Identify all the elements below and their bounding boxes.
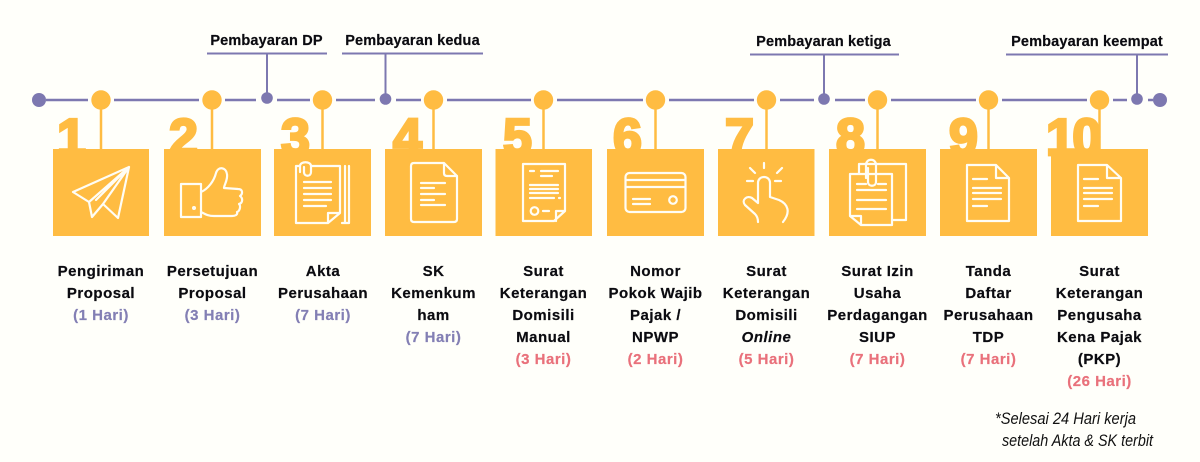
step 3: [274, 90, 371, 324]
icon: credit card: [626, 173, 686, 212]
label: Surat Keterangan Domisili Manual: Manual: [516, 329, 571, 346]
label: Surat Keterangan Domisili Manual: Surat: [523, 263, 564, 280]
label: PKP: (26 Hari): [1067, 373, 1132, 390]
label: Akta Perusahaan: Perusahaan: [278, 285, 368, 302]
timeline line: [46, 99, 1153, 101]
payment marker: Pembayaran ketiga: [750, 34, 899, 105]
label: TDP: TDP: [973, 329, 1004, 346]
step 10: [1046, 90, 1148, 390]
label: PKP: [1056, 263, 1143, 390]
label: NPWP: NPWP: [632, 329, 679, 346]
label: Domisili Online: Keterangan: [723, 285, 810, 302]
label: SK Kemenkumham: (7 Hari): [406, 329, 461, 346]
label: PKP: Kena Pajak: [1057, 329, 1142, 346]
step 8: 8: [836, 109, 865, 167]
label: NPWP: Nomor: [630, 263, 681, 280]
label: SK Kemenkumham: ham: [417, 307, 450, 324]
label: Pengiriman Proposal: Proposal: [67, 285, 135, 302]
step 5: [496, 90, 592, 368]
label: Persetujuan Proposal: Persetujuan: [167, 263, 258, 280]
label: Akta Perusahaan: Akta: [306, 263, 340, 280]
icon: document: [1078, 165, 1121, 221]
label: SIUP: Surat Izin: [841, 263, 914, 280]
label: SIUP: Perdagangan: [827, 307, 928, 324]
label: Domisili Online: [723, 263, 810, 368]
label: PKP: Surat: [1079, 263, 1120, 280]
step 7: 7: [725, 109, 754, 167]
label: TDP: (7 Hari): [961, 351, 1016, 368]
label: PKP: Pengusaha: [1057, 307, 1142, 324]
label: Persetujuan Proposal: [167, 263, 258, 324]
icon: document: [967, 165, 1009, 221]
step 1: 1: [57, 109, 86, 167]
label: SIUP: SIUP: [859, 329, 896, 346]
label: TDP: [943, 263, 1034, 368]
icon: clipped document stack: [296, 162, 349, 223]
label: SIUP: [827, 263, 928, 368]
step 3: 3: [281, 109, 310, 167]
step 2: [164, 90, 261, 324]
label: Persetujuan Proposal: Proposal: [178, 285, 247, 302]
label: Pengiriman Proposal: (1 Hari): [73, 307, 129, 324]
icon: rounded document: [411, 163, 457, 222]
label: Surat Keterangan Domisili Manual: Domisili: [512, 307, 575, 324]
icon: tapping finger: [744, 163, 788, 222]
icon: paper plane: [73, 167, 129, 218]
footnote: *Selesai 24 Hari kerja: [995, 410, 1136, 428]
icon: certificate document: [523, 164, 565, 221]
label: NPWP: (2 Hari): [628, 351, 683, 368]
step 7: [718, 90, 814, 368]
label: TDP: Tanda: [966, 263, 1011, 280]
label: Akta Perusahaan: [278, 263, 368, 324]
timeline end dot: [1153, 93, 1167, 107]
label: NPWP: Pajak /: [630, 307, 681, 324]
payment marker: Pembayaran ketiga: Pembayaran ketiga: [756, 34, 892, 50]
label: NPWP: Pokok Wajib: [608, 285, 703, 302]
payment marker: Pembayaran DP: [207, 33, 327, 104]
label: Akta Perusahaan: (7 Hari): [295, 307, 351, 324]
label: Domisili Online: Surat: [746, 263, 787, 280]
label: SK Kemenkumham: [391, 263, 476, 346]
payment marker: Pembayaran kedua: Pembayaran kedua: [345, 33, 481, 49]
footnote: [995, 410, 1154, 450]
label: SK Kemenkumham: Kemenkum: [391, 285, 476, 302]
step 5: 5: [503, 109, 532, 167]
label: TDP: Daftar: [965, 285, 1012, 302]
label: Surat Keterangan Domisili Manual: [500, 263, 587, 368]
label: TDP: Perusahaan: [943, 307, 1034, 324]
timeline start dot: [32, 93, 46, 107]
label: Persetujuan Proposal: (3 Hari): [185, 307, 240, 324]
step 2: 2: [169, 109, 198, 167]
label: SIUP: (7 Hari): [850, 351, 905, 368]
payment marker: Pembayaran keempat: [1006, 34, 1168, 105]
step 4: [385, 90, 482, 346]
step 6: [607, 90, 704, 368]
label: SIUP: Usaha: [854, 285, 901, 302]
label: Domisili Online: Online: [742, 329, 791, 346]
icon: clipped papers: [850, 160, 906, 225]
step 4: 4: [393, 109, 422, 167]
icon: thumbs up: [181, 168, 242, 217]
payment marker: Pembayaran DP: Pembayaran DP: [210, 33, 323, 49]
payment marker: Pembayaran keempat: Pembayaran keempat: [1011, 34, 1163, 50]
label: Surat Keterangan Domisili Manual: Keterangan: [500, 285, 587, 302]
label: Domisili Online: Domisili: [735, 307, 798, 324]
footnote: setelah Akta & SK terbit: [1002, 432, 1154, 450]
label: PKP: Keterangan: [1056, 285, 1143, 302]
step 9: [940, 90, 1037, 368]
label: Pengiriman Proposal: [58, 263, 144, 324]
step 10: 10: [1046, 109, 1099, 167]
label: Pengiriman Proposal: Pengiriman: [58, 263, 144, 280]
label: Domisili Online: (5 Hari): [739, 351, 794, 368]
step 1: [53, 90, 149, 324]
label: PKP: (PKP): [1078, 351, 1121, 368]
label: SK Kemenkumham: SK: [423, 263, 444, 280]
label: Surat Keterangan Domisili Manual: (3 Hari): [516, 351, 571, 368]
step 8: [827, 90, 928, 368]
step 9: 9: [949, 109, 978, 167]
payment marker: Pembayaran kedua: [342, 33, 483, 105]
label: NPWP: [608, 263, 703, 368]
step 6: 6: [613, 109, 642, 167]
